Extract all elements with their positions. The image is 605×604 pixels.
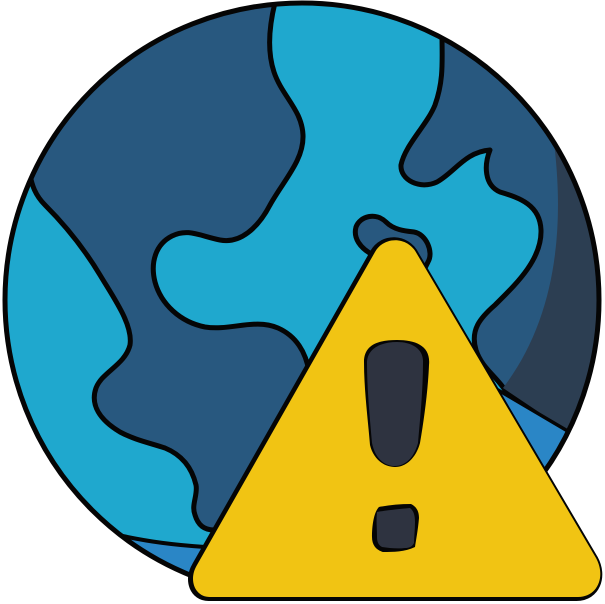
- land shadow: [503, 148, 596, 428]
- exclamation dot: [372, 504, 419, 552]
- triangle outline: [192, 241, 599, 598]
- exclamation bar: [364, 340, 429, 467]
- warning triangle: [192, 240, 600, 598]
- land: small island: [355, 216, 430, 270]
- sea: lower left blue band: [122, 534, 204, 572]
- land: right continent: [398, 40, 558, 414]
- land: left continent: [30, 6, 308, 532]
- triangle fill: [193, 240, 600, 597]
- sea: lower right blue band: [498, 388, 567, 467]
